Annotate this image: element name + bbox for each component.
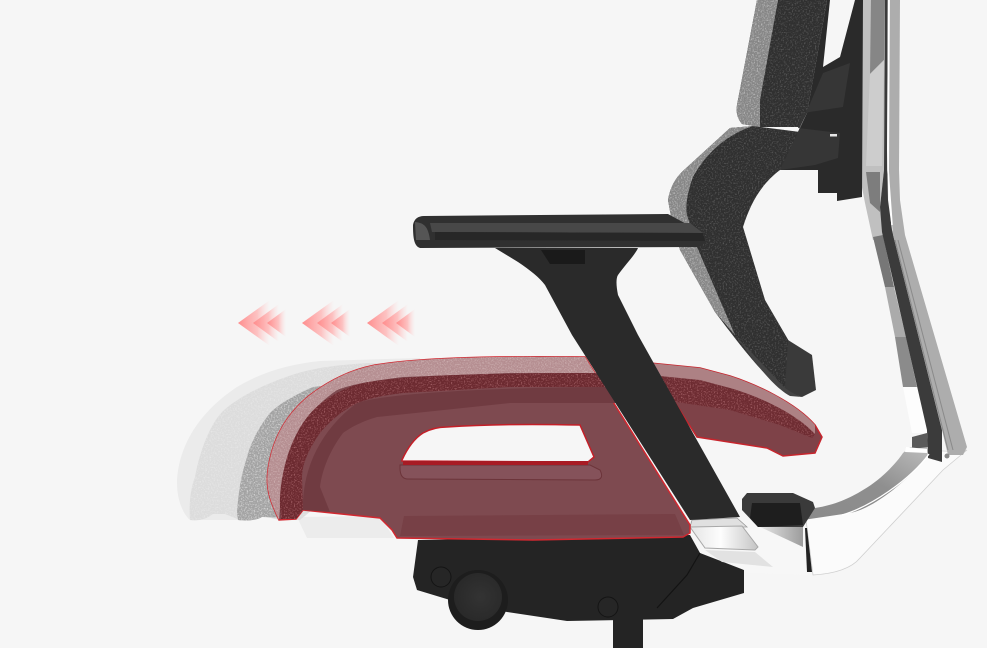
lumbar back cushion bbox=[668, 126, 816, 397]
outer foam layer bbox=[267, 357, 595, 520]
motion arrows bbox=[238, 300, 415, 346]
outer gray strip bbox=[889, 0, 967, 455]
screw right bbox=[598, 597, 618, 617]
upper back cushion bbox=[737, 0, 827, 127]
shell ridge shading bbox=[303, 387, 622, 512]
arm column bbox=[495, 248, 740, 520]
ghost seat positions bbox=[177, 358, 420, 538]
armrest pad bbox=[413, 214, 705, 248]
red highlighted seat (left of arm) bbox=[267, 357, 690, 540]
seat post bbox=[613, 618, 643, 648]
black back bracket bbox=[780, 0, 863, 201]
black foot block bbox=[742, 493, 815, 527]
lower shell lip bbox=[400, 514, 684, 536]
white lower body bbox=[805, 450, 967, 575]
seat mechanism base bbox=[413, 535, 744, 648]
chrome seat bracket bbox=[690, 518, 812, 575]
dark foam layer bbox=[280, 373, 613, 519]
bracket box bbox=[690, 526, 758, 550]
red highlighted seat (right of arm) bbox=[650, 363, 822, 456]
hole lower recess bbox=[400, 465, 602, 480]
hand hole bbox=[402, 424, 594, 462]
lower inner bands bbox=[873, 235, 894, 287]
chrome back frame bbox=[803, 0, 967, 575]
adjustment knob bbox=[448, 570, 508, 630]
upper inner glass panel bbox=[860, 0, 892, 240]
screw left bbox=[431, 567, 451, 587]
lower chrome sweep bbox=[803, 447, 928, 520]
dark strip bbox=[880, 0, 942, 462]
